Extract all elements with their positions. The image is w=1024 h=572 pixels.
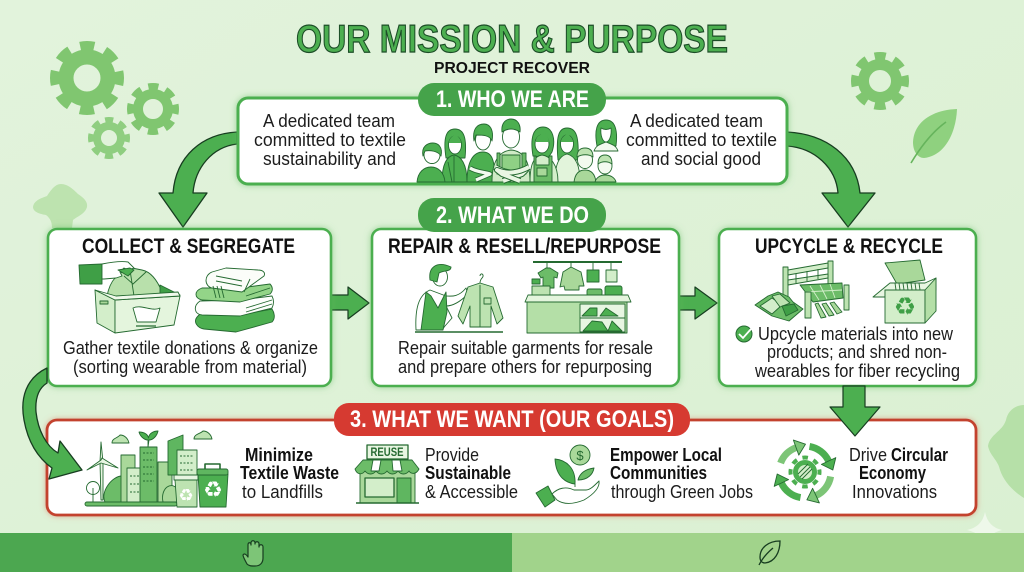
icon: green city with bins (85, 431, 228, 507)
heading text: 2. WHAT WE DO (436, 202, 589, 229)
icon: hand holding sprout and coin: $ (576, 448, 584, 463)
goal text: minimize textile waste: Minimize (245, 444, 313, 465)
body text: (sorting wearable from material) (73, 356, 307, 377)
goal text: drive circular economy: Drive (849, 444, 887, 465)
goal text: minimize textile waste: to Landfills (242, 481, 323, 502)
arrow: who we are to upcycle (787, 132, 875, 227)
panel: what we want goals (47, 420, 976, 515)
text block left: A dedicated team (263, 110, 395, 131)
icon: gear right (855, 56, 905, 106)
arrow: collect to goals (23, 368, 82, 479)
panel: upcycle and recycle (719, 229, 976, 386)
goal text: drive circular economy: Economy (859, 462, 927, 483)
title: OUR MISSION & PURPOSE (296, 18, 728, 61)
woman overalls (530, 127, 558, 182)
icon: check badge (736, 326, 752, 342)
decorative blob left (33, 184, 87, 228)
arrow: collect to repair (331, 287, 369, 319)
arrow: repair to upcycle (679, 287, 717, 319)
body text: and prepare others for repurposing (398, 356, 652, 377)
decorative blob right (988, 405, 1024, 498)
icon: reuse shop (355, 445, 419, 503)
goal text: drive circular economy: Innovations (852, 481, 937, 502)
text block right: and social good (641, 148, 761, 169)
panel heading: REPAIR & RESELL/REPURPOSE (388, 235, 661, 258)
icon: leaf right (911, 109, 957, 163)
man with cap centre (492, 119, 530, 182)
body text: Upcycle materials into new (758, 323, 954, 344)
bottom bar left (0, 533, 512, 572)
icon: shredder with recycling symbol: ♻ (894, 292, 916, 321)
icon: gears left (55, 46, 176, 156)
icon: green city with bins: ♻ (203, 478, 223, 503)
bottom bar (0, 533, 1024, 572)
text block left: committed to textile (254, 129, 406, 150)
icon: stack of folded textiles (195, 268, 274, 332)
subtitle: PROJECT RECOVER (434, 60, 590, 77)
panel: who we are (238, 98, 787, 184)
icon: circular economy cycle (774, 440, 836, 503)
panel box (372, 229, 679, 386)
child front right (595, 155, 616, 182)
icon: reuse shop: REUSE (370, 447, 404, 459)
panel: repair and resell (372, 229, 679, 386)
goal text: empower local communities: Communities (610, 462, 707, 483)
icon: shop counter with clothes rack (525, 262, 631, 333)
woman far right (594, 120, 618, 151)
pill heading: what we want (334, 403, 690, 436)
icon: donation box with hand (79, 262, 180, 333)
icon: team of people (417, 119, 618, 182)
icon: small gear (91, 120, 127, 156)
arrow: upcycle to goals (830, 386, 880, 436)
panel box (48, 229, 331, 386)
icon: loom with scraps (755, 261, 849, 321)
goal text: minimize textile waste: Textile Waste (240, 462, 339, 483)
goal text: sustainable and accessible: & Accessible (425, 481, 518, 502)
text block left: sustainability and (263, 148, 396, 169)
panel box (719, 229, 976, 386)
panel heading: COLLECT & SEGREGATE (82, 235, 295, 258)
text block right: committed to textile (626, 129, 777, 150)
panel: collect and segregate (48, 229, 331, 386)
pill heading: what we do (418, 198, 606, 232)
icon: green city with bins: ♻ (178, 486, 194, 506)
panel box (238, 98, 787, 184)
body text: Repair suitable garments for resale (398, 337, 653, 358)
man arms crossed (467, 124, 495, 182)
body text: wearables for fiber recycling (754, 360, 960, 381)
body text: products; and shred non- (767, 341, 947, 362)
decorative sparkle (967, 512, 1002, 548)
body text: Gather textile donations & organize (63, 337, 318, 358)
icon: medium gear (130, 86, 176, 132)
icon: hand (243, 541, 263, 566)
heading text: 1. WHO WE ARE (436, 86, 589, 113)
goal text: empower local communities: Empower Local (610, 444, 722, 465)
icon: tailor with shirt (415, 265, 503, 332)
goal text: sustainable and accessible: Sustainable (425, 462, 511, 483)
bottom bar right (512, 533, 1024, 572)
text block right: A dedicated team (630, 110, 763, 131)
icon: large gear (55, 46, 119, 110)
pill heading: who we are (418, 83, 606, 116)
panel heading: UPCYCLE & RECYCLE (755, 235, 943, 258)
girl long hair (442, 129, 467, 182)
goal text: drive circular economy: Circular (891, 444, 948, 465)
icon: hand holding sprout and coin (536, 445, 599, 507)
heading text: 3. WHAT WE WANT (OUR GOALS) (350, 406, 674, 433)
child front (574, 148, 596, 182)
arrow: who we are to collect (159, 132, 237, 227)
panel box (47, 420, 976, 515)
boy (417, 143, 445, 182)
woman (555, 128, 580, 182)
goal text: sustainable and accessible: Provide (425, 444, 479, 465)
icon: shredder with recycling symbol (873, 260, 936, 323)
goal text: empower local communities: through Green Jobs (611, 481, 753, 502)
icon: leaf (759, 541, 780, 565)
